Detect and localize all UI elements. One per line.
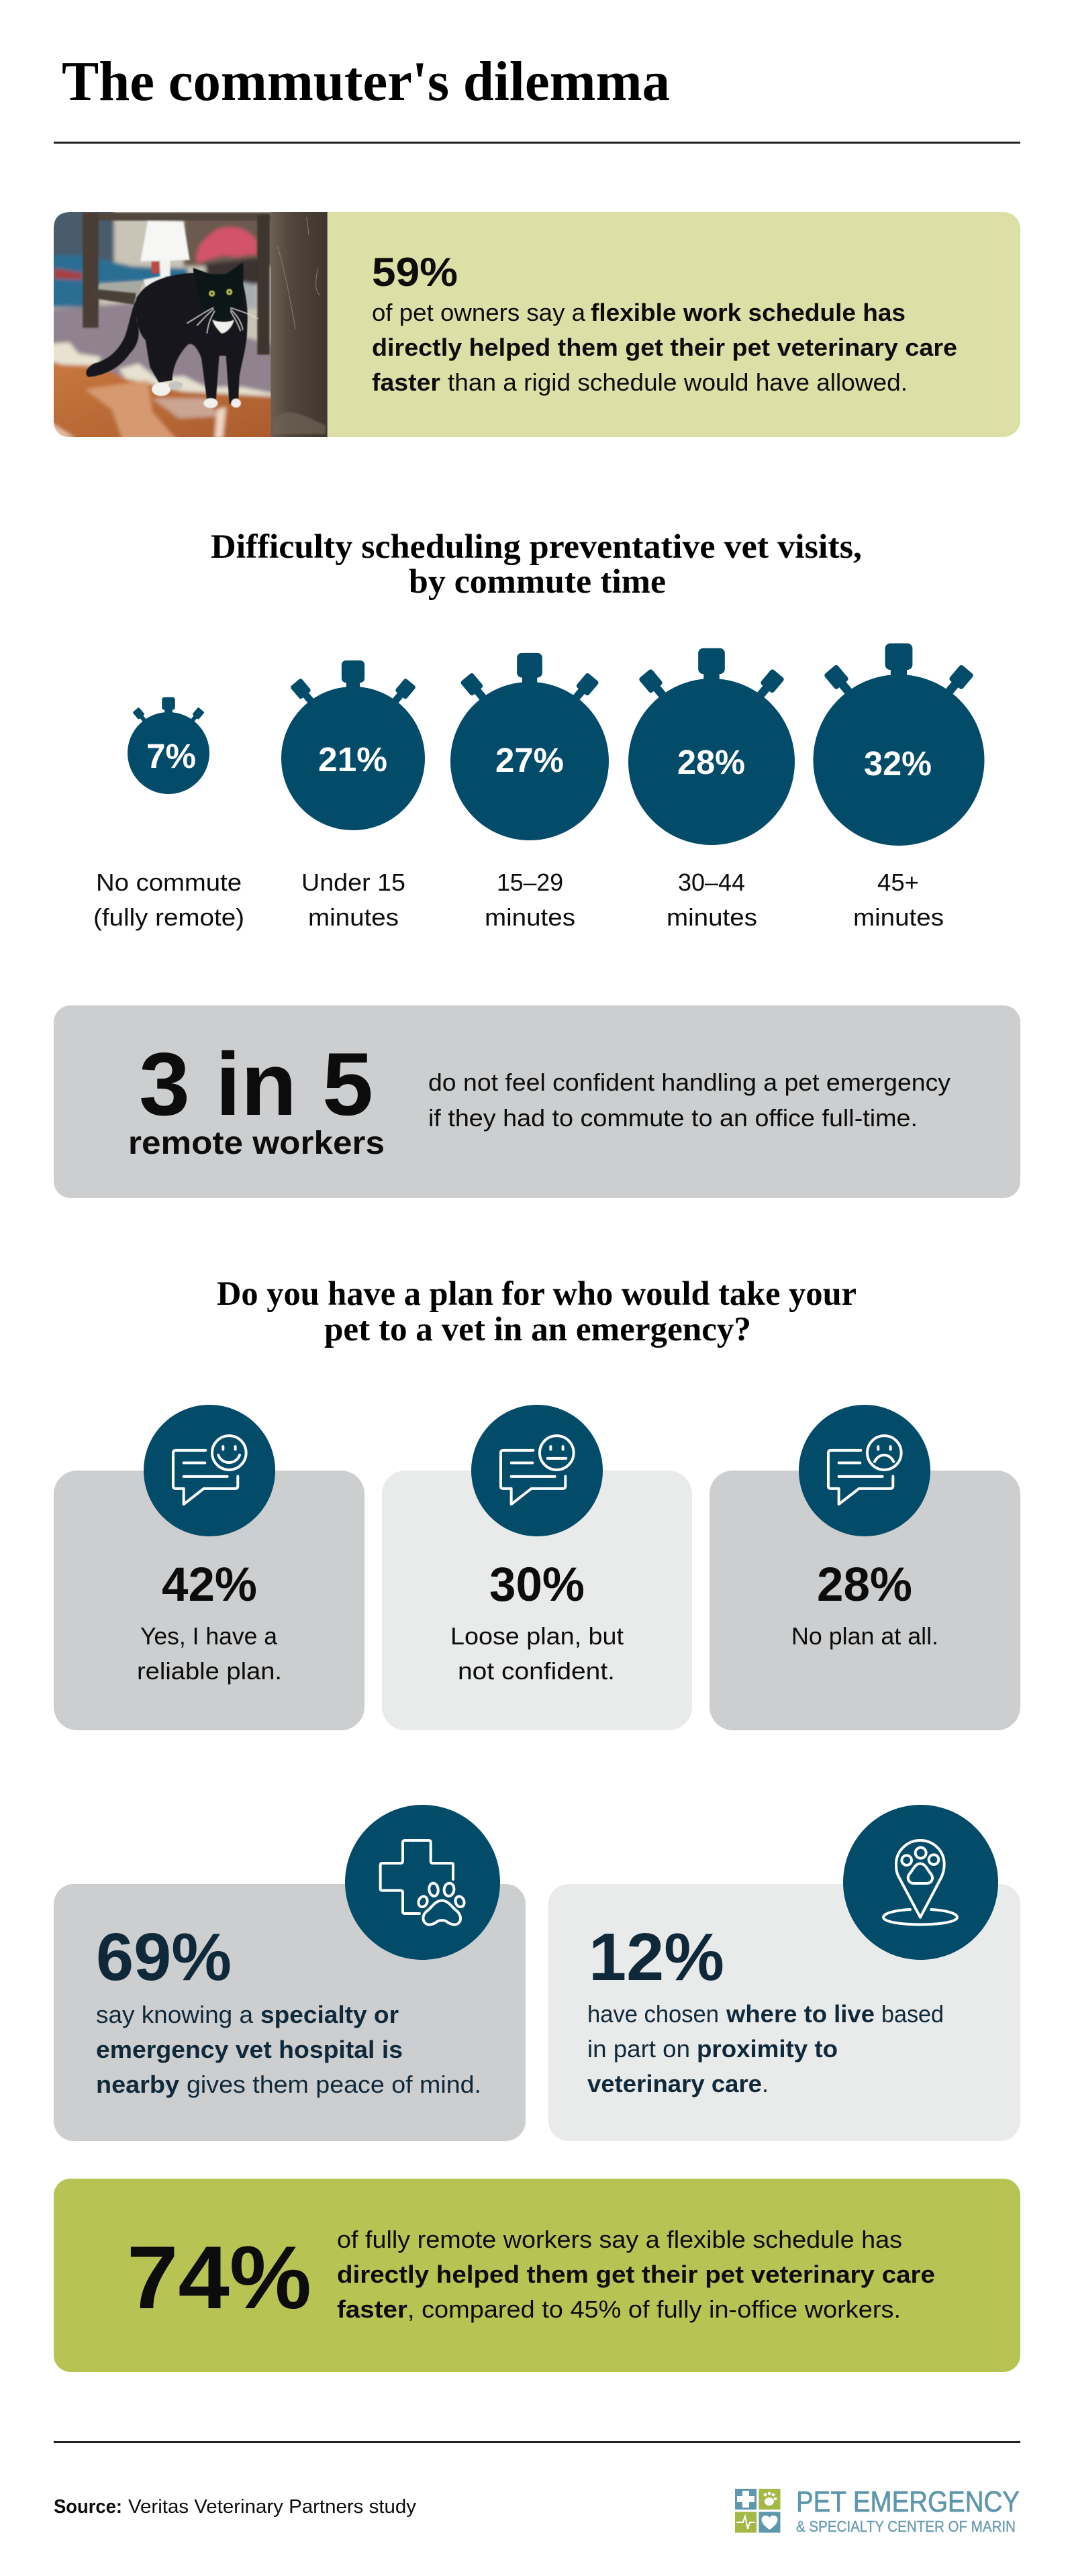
body text: where to live: veterinary care <box>587 2070 762 2097</box>
icon: chat bubble neutral <box>471 1405 603 1536</box>
body text: where to live: where to live <box>726 2000 875 2028</box>
stat: 3 in 5: 3 in 5 <box>139 1035 373 1134</box>
body text: where to live: proximity to <box>697 2035 838 2063</box>
label: no plan: No plan at all. <box>791 1622 938 1650</box>
body text: remote workers flexible schedule: directly helped them get their pet veterinary care <box>337 2261 935 2288</box>
body text: remote workers flexible schedule: faster <box>337 2295 407 2323</box>
body text: not confident: do not feel confident handling a pet emergency <box>428 1069 950 1096</box>
stopwatch: 30-44 minutes 28%: minutes <box>667 903 757 931</box>
stopwatch: 45+ minutes 32%: minutes <box>853 903 944 931</box>
stat: 28%: 28% <box>817 1558 912 1612</box>
panel: 74% fully remote workers <box>54 2179 1020 2372</box>
heading: emergency plan question <box>217 1275 857 1348</box>
logo: Pet Emergency & Specialty Center of Marin: & SPECIALTY CENTER OF MARIN <box>796 2518 1016 2535</box>
body text: flexible schedule: than a rigid schedule would have allowed. <box>448 368 908 396</box>
stopwatch: 15-29 minutes 27% <box>450 653 609 931</box>
icon: cross with paw <box>345 1805 500 1960</box>
label: loose plan: not confident. <box>458 1657 615 1685</box>
body text: flexible schedule <box>372 299 957 396</box>
label: reliable plan: Yes, I have a <box>140 1622 278 1650</box>
stopwatch: no commute 7%: No commute <box>96 869 242 896</box>
logo: Pet Emergency & Specialty Center of Marin <box>735 2485 1020 2535</box>
body text: where to live: . <box>762 2070 769 2097</box>
logo mark <box>735 2489 780 2533</box>
body text: flexible schedule: flexible work schedule has <box>591 299 906 326</box>
heading: emergency plan question: pet to a vet in an emergency? <box>324 1311 751 1348</box>
body text: remote workers flexible schedule: of fully remote workers say a flexible schedule has <box>337 2226 902 2253</box>
chart: stopwatches by commute time <box>93 643 984 931</box>
body text: peace of mind: emergency vet hospital is <box>96 2036 403 2063</box>
stat: 69%: 69% <box>96 1920 232 1995</box>
heading: difficulty by commute time: Difficulty scheduling preventative vet visits, <box>211 528 862 566</box>
body text: flexible schedule: of pet owners say a <box>372 299 586 326</box>
body text: not confident: if they had to commute to an office full-time. <box>428 1104 918 1132</box>
body text: peace of mind: gives them peace of mind. <box>187 2071 481 2098</box>
stopwatch: 45+ minutes 32%: 45+ <box>877 869 919 896</box>
heading: emergency plan question: Do you have a plan for who would take your <box>217 1275 857 1313</box>
panel: 12% where to live <box>548 1805 1020 2141</box>
stopwatch: 15-29 minutes 27%: 27% <box>495 741 564 779</box>
stopwatch: no commute 7% <box>93 697 244 931</box>
stat: 12%: 12% <box>589 1920 724 1995</box>
body text: where to live <box>587 2000 944 2097</box>
panel: 30% loose plan <box>382 1405 692 1730</box>
body text: flexible schedule: faster <box>372 368 440 396</box>
panel: 42% reliable plan <box>54 1405 364 1730</box>
stopwatch: 30-44 minutes 28%: 28% <box>677 743 745 781</box>
icon: map pin with paw <box>843 1805 998 1960</box>
stopwatch: under 15 minutes 21%: minutes <box>308 903 399 931</box>
stopwatch: 15-29 minutes 27%: minutes <box>485 903 575 931</box>
photo: tuxedo cat <box>54 212 328 437</box>
label: loose plan <box>450 1622 624 1685</box>
stopwatch: 15-29 minutes 27%: 15–29 <box>497 869 563 896</box>
stat: 59%: 59% <box>372 250 458 295</box>
body text: not confident <box>428 1069 950 1132</box>
stat label: remote workers: remote workers <box>128 1126 385 1161</box>
body text: where to live: in part on <box>587 2035 690 2063</box>
body text: where to live: based <box>881 2000 944 2028</box>
label: reliable plan <box>137 1622 282 1685</box>
title: The commuter's dilemma <box>62 50 670 113</box>
label: reliable plan: reliable plan. <box>137 1657 282 1685</box>
body text: flexible schedule: directly helped them get their pet veterinary care <box>372 334 957 361</box>
panel: 69% peace of mind <box>54 1805 526 2141</box>
logo: Pet Emergency & Specialty Center of Marin: PET EMERGENCY <box>796 2485 1020 2518</box>
body text: remote workers flexible schedule <box>337 2226 935 2323</box>
stat: 30%: 30% <box>489 1558 585 1612</box>
label: loose plan: Loose plan, but <box>450 1622 624 1650</box>
body text: peace of mind: say knowing a <box>96 2001 254 2028</box>
body text: peace of mind: nearby <box>96 2071 179 2098</box>
source note: Veritas Veterinary Partners study <box>128 2496 417 2518</box>
stopwatch: 45+ minutes 32%: 32% <box>864 744 932 783</box>
panel: 59% flexible schedule <box>40 201 1020 448</box>
stopwatch: 30-44 minutes 28%: 30–44 <box>678 869 745 896</box>
stopwatch: under 15 minutes 21%: 21% <box>318 740 387 779</box>
stopwatch: under 15 minutes 21%: Under 15 <box>301 869 405 896</box>
icon: chat bubble smile <box>144 1405 275 1536</box>
stopwatch: 30-44 minutes 28% <box>628 648 795 931</box>
panel: 28% no plan <box>710 1405 1020 1730</box>
body text: peace of mind <box>96 2001 481 2098</box>
stopwatch: 45+ minutes 32% <box>814 643 984 931</box>
stopwatch: no commute 7%: 7% <box>146 737 196 775</box>
stopwatch: under 15 minutes 21% <box>281 660 425 931</box>
panel: 3 in 5 remote workers <box>54 1005 1020 1198</box>
body text: peace of mind: specialty or <box>260 2001 399 2028</box>
heading: difficulty by commute time <box>211 528 862 601</box>
stat: 74%: 74% <box>127 2228 311 2328</box>
stat: 42%: 42% <box>162 1558 257 1612</box>
heading: difficulty by commute time: by commute time <box>409 563 666 601</box>
source note: Source: <box>54 2496 122 2518</box>
body text: where to live: have chosen <box>587 2000 719 2028</box>
icon: chat bubble sad <box>799 1405 930 1536</box>
body text: remote workers flexible schedule: , compared to 45% of fully in-office workers. <box>407 2295 901 2323</box>
stopwatch: no commute 7%: (fully remote) <box>93 903 244 931</box>
